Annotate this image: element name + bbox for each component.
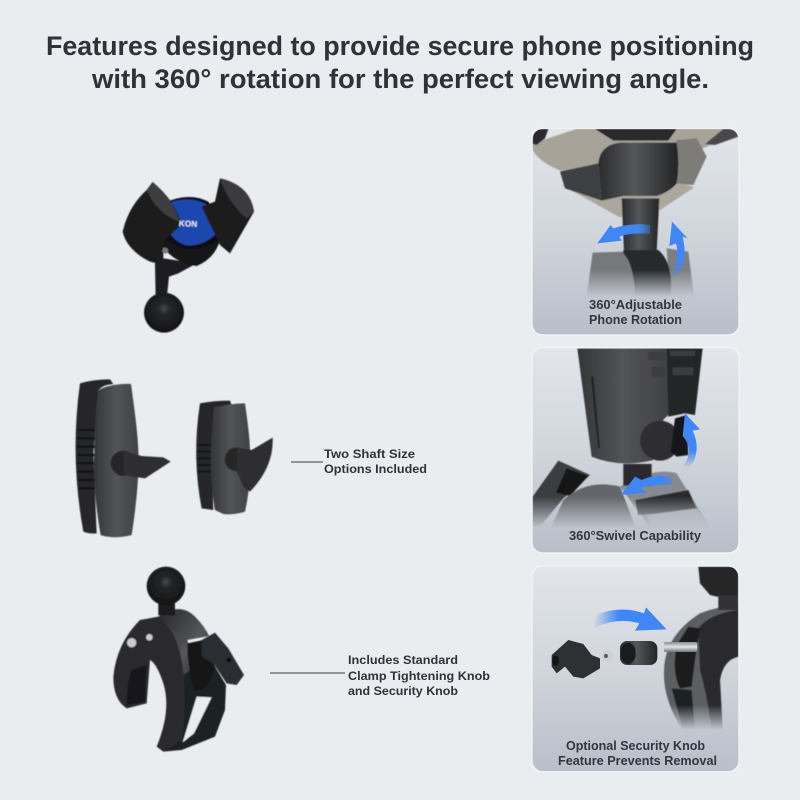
right grip <box>202 178 254 253</box>
caption: phone rotation: 360°Adjustable <box>589 297 682 312</box>
knob screw <box>187 640 215 691</box>
security knob photo <box>664 567 738 732</box>
rotation photo <box>533 129 738 297</box>
arrow: swivel left <box>621 475 673 495</box>
arrow: rotate up <box>669 222 688 277</box>
label: shaft sizes: Options Included <box>324 462 427 476</box>
clamp knob <box>202 633 244 685</box>
caption: security knob <box>558 738 717 768</box>
leader line: clamp <box>270 672 345 674</box>
long arm ribs <box>77 430 96 488</box>
blue adhesive disc <box>163 197 227 249</box>
jaw opening <box>183 697 212 742</box>
clamp top body <box>158 609 209 675</box>
label: clamp: Clamp Tightening Knob <box>348 669 490 683</box>
caption: swivel: 360°Swivel Capability <box>569 528 702 543</box>
panel background <box>533 567 738 771</box>
holder base <box>158 207 220 266</box>
security knob <box>552 640 600 678</box>
label: clamp: Includes Standard <box>348 653 458 667</box>
caption: phone rotation: Phone Rotation <box>589 312 682 327</box>
long arm knob <box>111 451 136 476</box>
label: clamp <box>348 653 490 698</box>
caption: phone rotation <box>589 297 682 327</box>
product: two shaft size arms <box>76 379 273 537</box>
short arm back <box>196 401 232 510</box>
logo: KON <box>179 218 198 229</box>
title: with 360° rotation for the perfect viewing angle. <box>91 64 709 94</box>
short arm body <box>211 403 250 514</box>
arrow: swivel up <box>683 413 700 467</box>
short arm knob <box>225 447 249 471</box>
panel background <box>533 348 738 552</box>
lower right jaw <box>163 663 226 752</box>
screw <box>162 248 168 254</box>
panel background <box>533 129 738 334</box>
left grip <box>123 182 180 265</box>
product: clamp with ball <box>113 567 244 752</box>
title <box>46 31 754 94</box>
short arm ribs <box>197 445 212 472</box>
clamp left jaw <box>113 617 185 752</box>
panel border <box>531 565 740 773</box>
leader line: shaft sizes <box>291 462 323 463</box>
security pin <box>664 642 697 652</box>
panel: phone rotation <box>531 127 740 336</box>
long arm body <box>94 384 139 537</box>
caption: security knob: Feature Prevents Removal <box>558 753 717 768</box>
washer <box>602 650 613 661</box>
title: Features designed to provide secure phone positioning <box>46 31 754 61</box>
label: shaft sizes: Two Shaft Size <box>324 447 415 461</box>
sleeve <box>620 641 657 665</box>
mount ball <box>144 293 184 333</box>
grip pad <box>127 665 147 705</box>
panel border <box>531 127 740 336</box>
ball neck <box>158 603 175 615</box>
long arm back <box>76 379 113 533</box>
swivel photo <box>533 348 712 532</box>
caption: security knob: Optional Security Knob <box>566 738 705 753</box>
panel: swivel <box>531 347 740 554</box>
product: phone holder with ball <box>123 178 254 333</box>
panel: security knob <box>531 565 740 773</box>
panel border <box>531 347 740 554</box>
arrow: rotate left <box>597 224 650 243</box>
arrow: insert knob <box>593 607 667 631</box>
label: clamp: and Security Knob <box>348 684 458 698</box>
clamp rivets <box>127 638 136 647</box>
clamp ball <box>147 567 185 605</box>
holder stem <box>155 258 197 298</box>
label: shaft sizes <box>324 447 427 476</box>
